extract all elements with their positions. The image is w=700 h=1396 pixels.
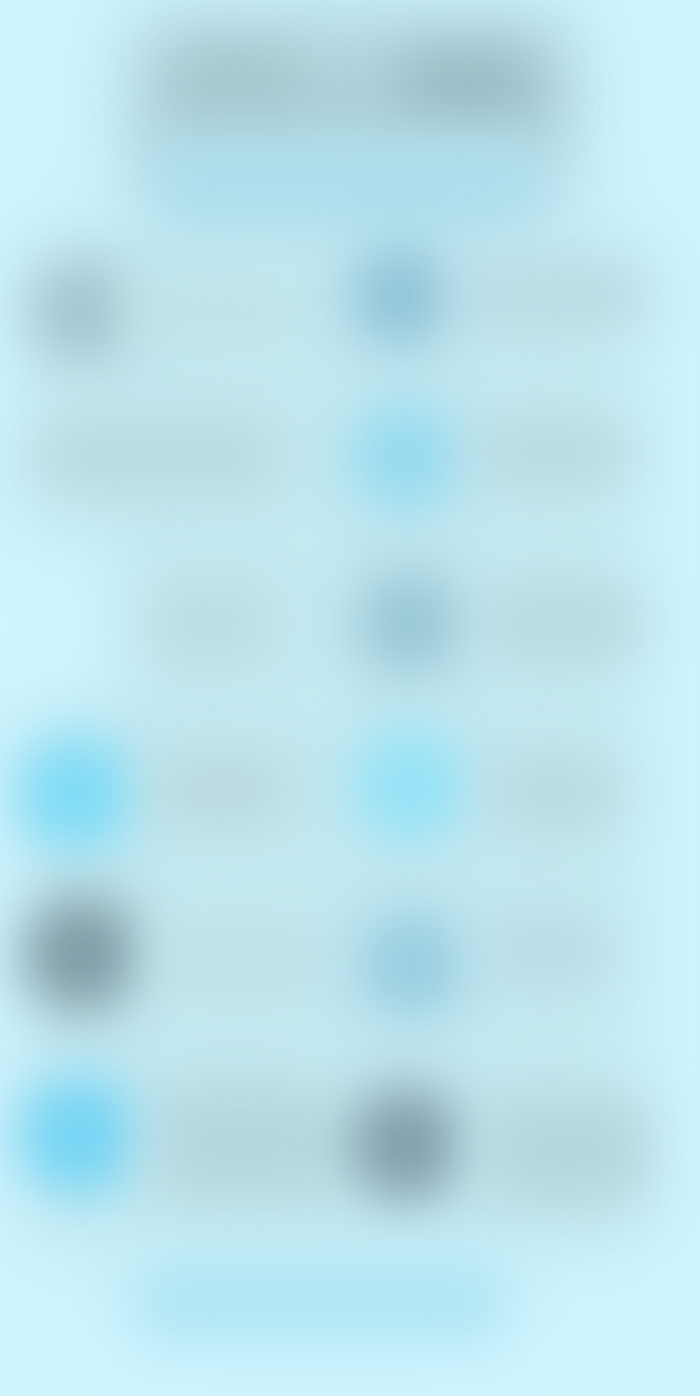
row 4 right: icon bbox=[352, 728, 468, 844]
row 3 left: text bbox=[150, 585, 270, 660]
row 5 right: icon bbox=[355, 908, 467, 1020]
footer band bbox=[130, 1255, 510, 1345]
title word right bbox=[395, 52, 540, 114]
row 2 right: text bbox=[475, 420, 630, 485]
row 1 right: text bbox=[460, 265, 650, 325]
panel: header bbox=[94, 0, 606, 248]
title word left bbox=[170, 55, 300, 107]
row 5 left: text bbox=[160, 925, 320, 995]
background mid-tone panel bbox=[20, 225, 645, 1255]
row 6 left: text bbox=[155, 1085, 330, 1200]
row 4 right: text bbox=[490, 755, 620, 830]
row 5 left: icon bbox=[22, 895, 140, 1013]
row 3 right: text bbox=[485, 585, 640, 660]
row 5 right: text bbox=[485, 915, 610, 985]
row 1 left: icon bbox=[28, 258, 134, 364]
row 2 left: text bbox=[35, 420, 280, 490]
row 4 left: text bbox=[155, 755, 290, 825]
row 3 right: icon bbox=[355, 568, 463, 676]
row 2 right: icon bbox=[348, 400, 462, 514]
title block bbox=[130, 15, 575, 190]
row 6 left: icon bbox=[18, 1075, 138, 1195]
row 6 right: icon bbox=[346, 1085, 464, 1203]
light patch: left margin bbox=[0, 540, 120, 710]
subtitle band bbox=[150, 140, 545, 230]
row 1 left: text bbox=[130, 280, 300, 340]
row 6 right: text bbox=[485, 1095, 650, 1205]
row 1 right: icon bbox=[347, 243, 453, 349]
row 4 left: icon bbox=[16, 735, 134, 853]
